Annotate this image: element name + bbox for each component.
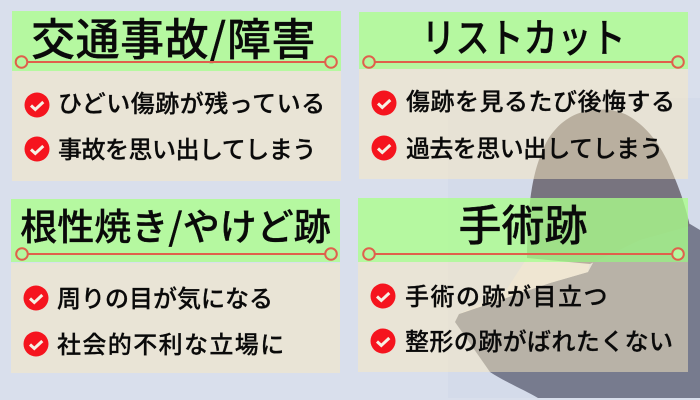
panel body: [12, 71, 341, 181]
panel: 交通事故/障害: [12, 4, 341, 181]
panel body: [11, 263, 340, 373]
panel body: [359, 69, 688, 179]
list item: 事故を思い出してしまう: [58, 130, 316, 165]
heading: リストカット: [422, 6, 626, 64]
heading: 根性焼き/やけど跡: [20, 197, 331, 251]
panel: 根性焼き/やけど跡: [11, 197, 340, 373]
heading: 手術跡: [458, 192, 588, 254]
list item: 手術の跡が目立つ: [405, 277, 609, 312]
list item: ひどい傷跡が残っている: [58, 84, 326, 119]
panel header: [11, 199, 340, 262]
list item: 周りの目が気になる: [57, 279, 273, 314]
panel header: [359, 12, 688, 69]
divider with end circles: [15, 247, 338, 261]
panel: リストカット: [359, 6, 688, 179]
list item: 整形の跡がばれたくない: [405, 322, 673, 357]
divider with end circles: [362, 247, 685, 261]
panel header: [12, 11, 341, 71]
panel body: [358, 262, 688, 372]
divider with end circles: [362, 55, 685, 69]
heading: 交通事故/障害: [31, 4, 316, 68]
divider with end circles: [14, 55, 338, 69]
list item: 社会的不利な立場に: [57, 325, 286, 360]
list item: 過去を思い出してしまう: [406, 129, 663, 164]
list item: 傷跡を見るたび後悔する: [406, 82, 676, 117]
panel header: [358, 198, 688, 262]
panel: 手術跡: [358, 192, 688, 372]
